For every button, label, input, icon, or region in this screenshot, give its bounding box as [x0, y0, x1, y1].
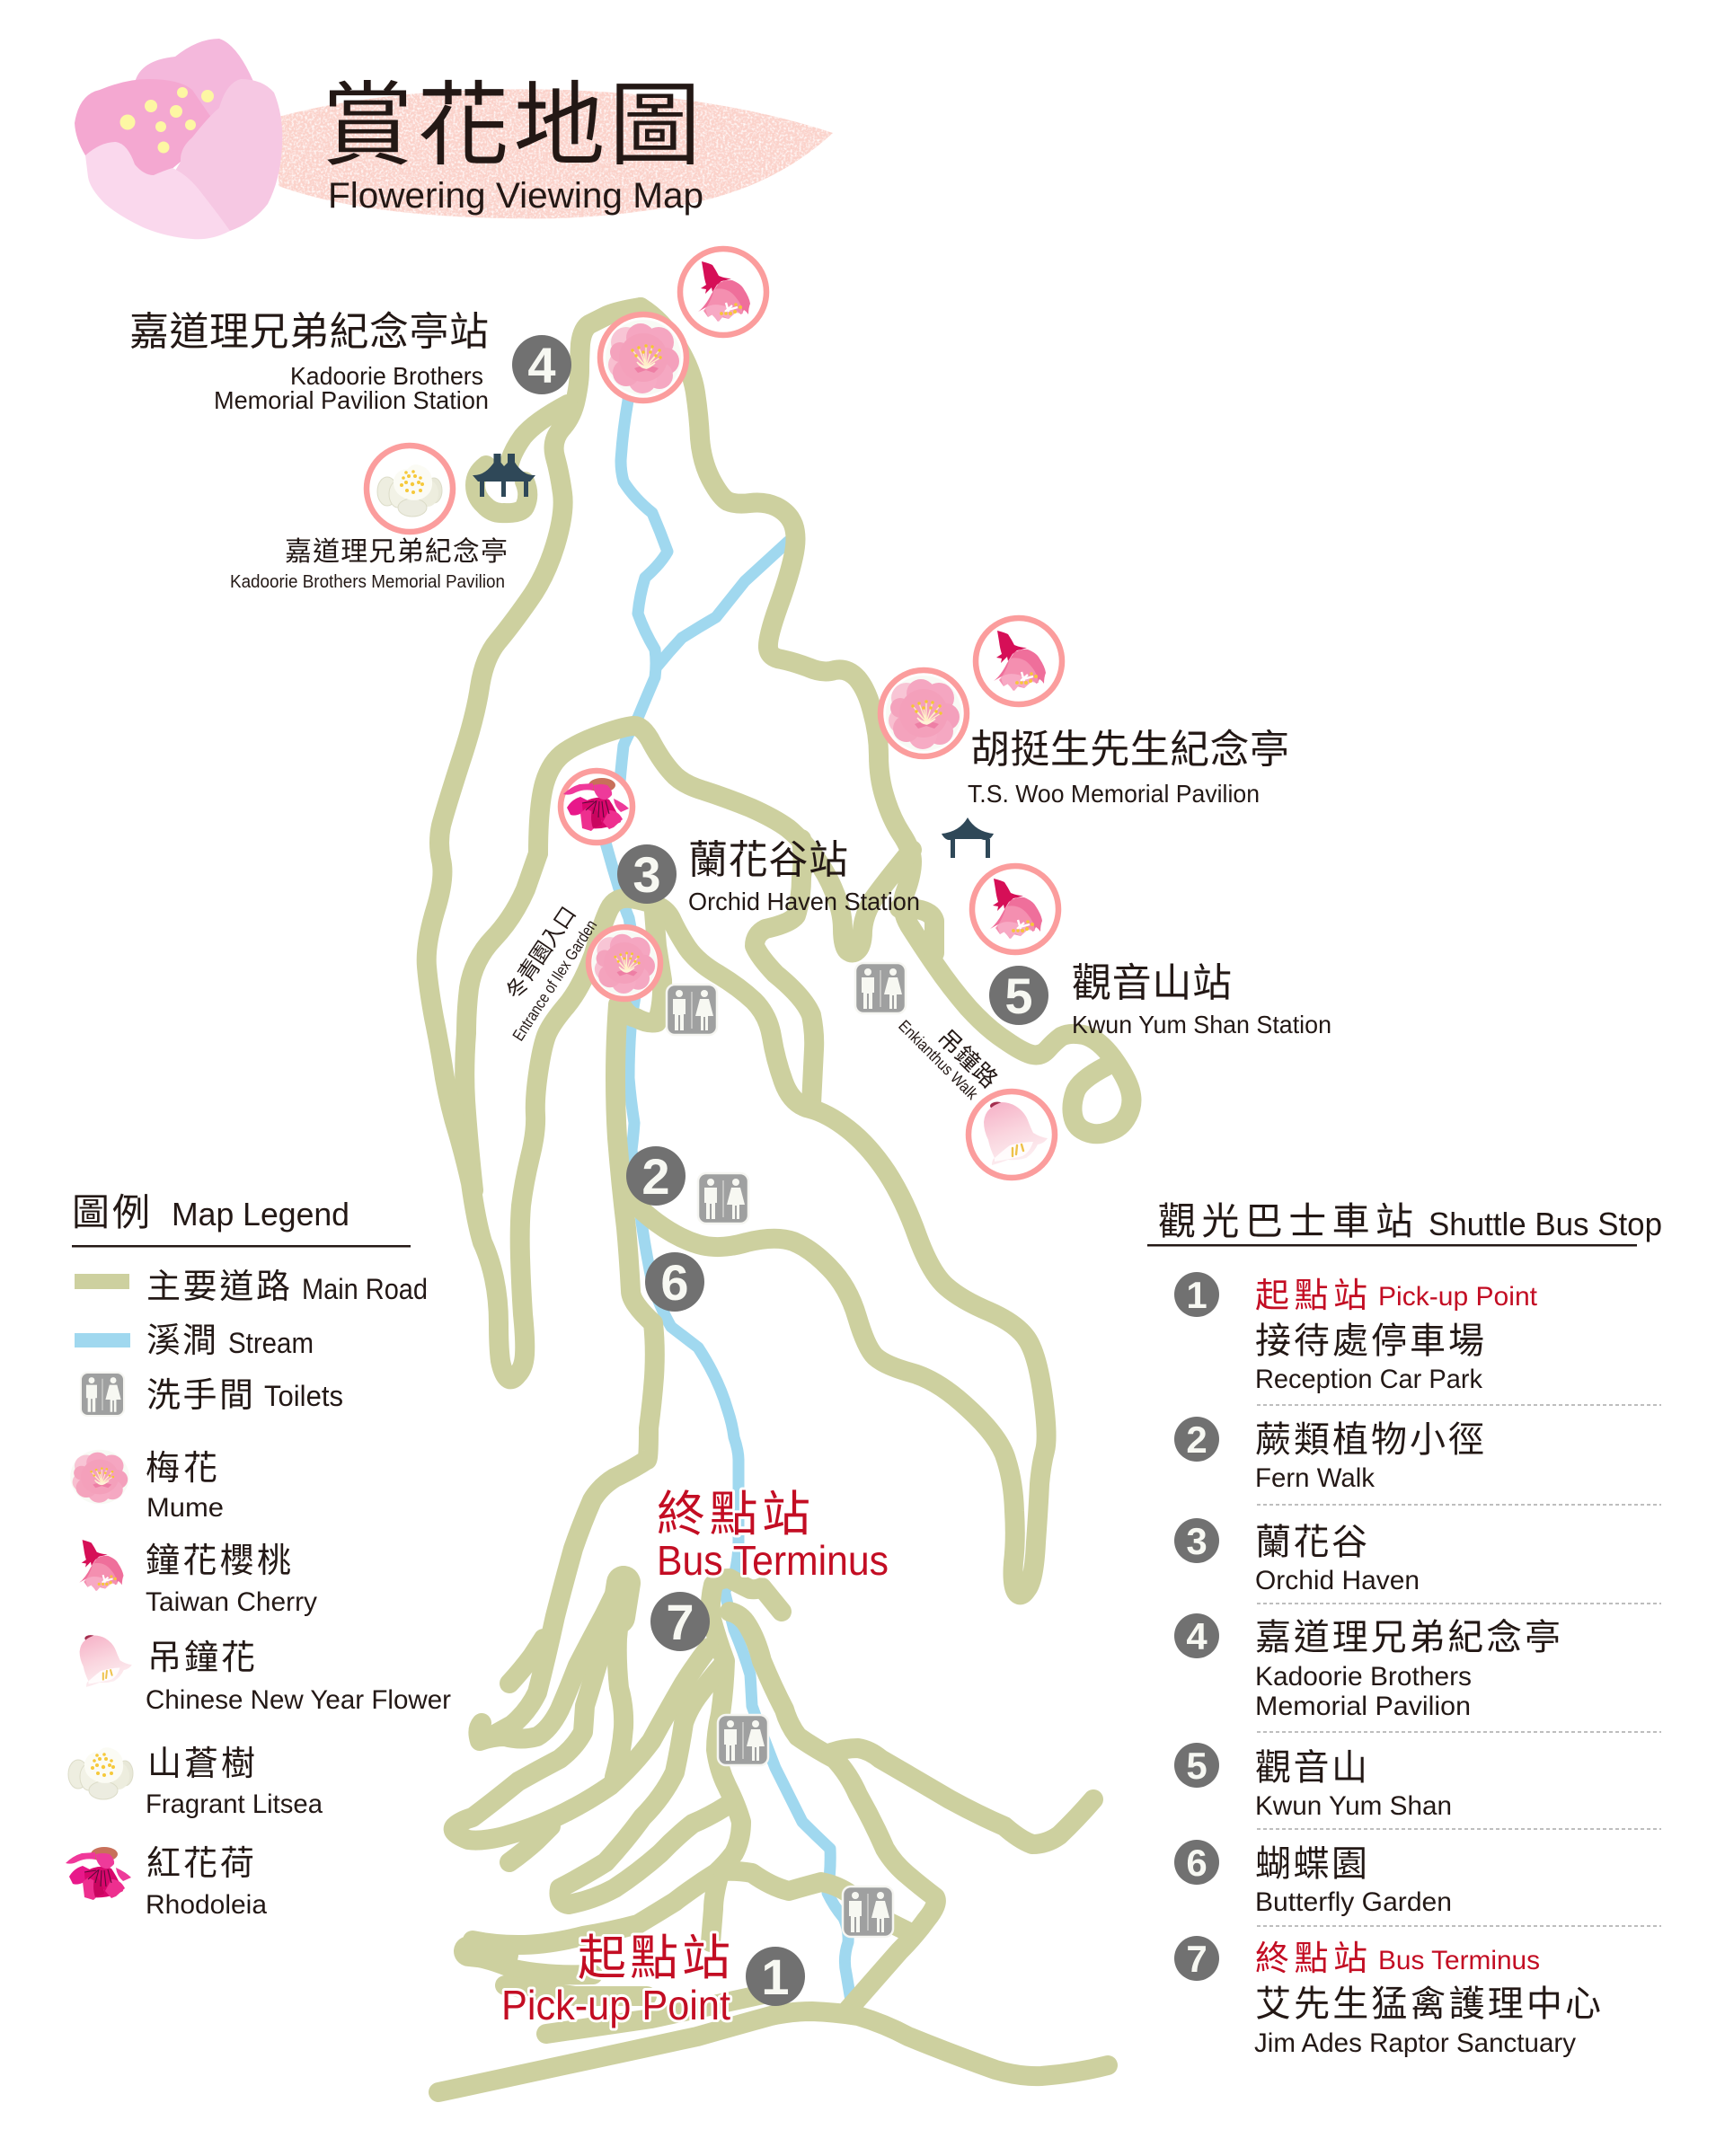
badge 1: [746, 1947, 805, 2006]
icon: ring mume orchid: [588, 927, 660, 999]
legend heading: 圖例: [72, 1182, 150, 1237]
icon: toilet orchid: [667, 985, 717, 1035]
legend: rhodoleia: Rhodoleia: [146, 1890, 267, 1920]
legend: main road: 主要道路: [146, 1259, 290, 1308]
stop 4: Memorial Pavilion: [1255, 1692, 1471, 1721]
stop 7: Jim Ades Raptor Sanctuary: [1254, 2028, 1576, 2058]
title background leaf: [279, 89, 833, 218]
label: ilex garden entrance: 冬青園入口: [497, 899, 582, 1004]
label: orchid haven station: [688, 827, 920, 915]
label: enkianthus walk: Enkianthus Walk: [895, 1017, 982, 1103]
legend: mume: 梅花: [146, 1440, 217, 1489]
legend: main road: Main Road: [302, 1273, 428, 1305]
label: orchid haven station: Orchid Haven Station: [688, 888, 920, 915]
legend: toilets: Toilets: [264, 1380, 343, 1412]
legend: taiwan cherry: 鐘花櫻桃: [146, 1533, 291, 1582]
icon: title flower: [75, 39, 282, 239]
label: pick-up point: [501, 1918, 730, 2028]
icon: pavilion kadoorie: [473, 454, 535, 497]
stop 1: [1174, 1268, 1661, 1405]
legend: chinese new year flower: 吊鐘花: [147, 1630, 255, 1679]
stop 7: Bus Terminus: [1378, 1946, 1540, 1975]
icon: ring mume pavilion: [880, 670, 967, 756]
stop 5: 5: [1186, 1745, 1208, 1787]
label: kadoorie station: [129, 299, 489, 414]
stop 3: 蘭花谷: [1255, 1513, 1367, 1565]
label: woo pavilion: T.S. Woo Memorial Pavilion: [968, 780, 1260, 808]
badge 7: [650, 1592, 710, 1651]
badge 4: 4: [527, 337, 556, 393]
legend heading: Map Legend: [172, 1196, 349, 1233]
shuttle heading: Shuttle Bus Stop: [1429, 1206, 1662, 1242]
badge 2: 2: [641, 1148, 670, 1205]
stop 3: 3: [1186, 1520, 1208, 1562]
label: kadoorie pavilion: [230, 529, 508, 592]
label: pick-up point: 起點站: [578, 1918, 730, 1989]
badge 1: 1: [761, 1948, 790, 2005]
label: kadoorie station: 嘉道理兄弟紀念亭站: [129, 299, 489, 357]
stop 2: 蕨類植物小徑: [1255, 1410, 1484, 1462]
stop 3: [1174, 1513, 1661, 1604]
title: 賞花地圖: [322, 52, 701, 184]
streams: [606, 377, 851, 2001]
legend: fragrant litsea: 山蒼樹: [147, 1736, 255, 1785]
stop 4: 4: [1186, 1615, 1208, 1657]
label: bus terminus: Bus Terminus: [657, 1537, 889, 1584]
label: woo pavilion: [968, 717, 1289, 808]
stop 6: 6: [1186, 1842, 1208, 1884]
legend: toilets: [81, 1367, 343, 1417]
legend: rhodoleia: 紅花荷: [146, 1835, 254, 1885]
legend: fragrant litsea: Fragrant Litsea: [146, 1789, 323, 1819]
badge 5: [989, 966, 1048, 1025]
legend: mume: Mume: [146, 1493, 224, 1523]
stop 1: 1: [1186, 1274, 1208, 1316]
icon: ring taiwan cherry top: [680, 249, 766, 335]
legend: taiwan cherry: [79, 1533, 317, 1617]
legend: chinese new year flower: Chinese New Year Flower: [146, 1685, 451, 1715]
stop 3: Orchid Haven: [1255, 1566, 1420, 1595]
stop 1: Reception Car Park: [1255, 1365, 1483, 1394]
icon: ring rhodoleia: [561, 771, 632, 843]
badge 6: 6: [660, 1254, 689, 1311]
stop 2: Fern Walk: [1255, 1463, 1376, 1493]
badge 6: [645, 1252, 704, 1312]
legend: mume: [70, 1440, 224, 1523]
stop 5: 觀音山: [1255, 1738, 1367, 1790]
stop 7: [1174, 1931, 1601, 2058]
main roads: [427, 307, 1131, 2092]
stop 4: 嘉道理兄弟紀念亭: [1255, 1608, 1561, 1660]
stop 7: 終點站: [1255, 1931, 1367, 1980]
stop 1: Pick-up Point: [1378, 1282, 1538, 1312]
badge 3: 3: [632, 846, 661, 903]
badge 5: 5: [1004, 968, 1033, 1024]
legend: taiwan cherry: Taiwan Cherry: [146, 1587, 317, 1617]
label: bus terminus: [657, 1474, 889, 1584]
label: enkianthus walk: 吊鐘路: [931, 1021, 1006, 1094]
panel: map legend: [66, 1182, 451, 1920]
badge 2: [626, 1146, 686, 1206]
label: orchid haven station: 蘭花谷站: [688, 827, 848, 885]
stop 6: 蝴蝶園: [1255, 1834, 1367, 1886]
badge 4: [512, 335, 571, 394]
panel: shuttle bus stop: [1147, 1191, 1662, 2058]
legend: stream: [75, 1312, 314, 1362]
stop 2: 2: [1186, 1418, 1208, 1461]
legend heading: [72, 1182, 411, 1247]
label: bus terminus: 終點站: [657, 1474, 810, 1545]
icon: ring taiwan cherry woo: [976, 618, 1062, 704]
legend: stream: 溪澗: [146, 1312, 217, 1362]
legend: toilets: 洗手間: [146, 1367, 253, 1417]
legend: stream: Stream: [228, 1327, 314, 1359]
legend: rhodoleia: [66, 1835, 267, 1920]
badge 3: [617, 844, 677, 904]
stop 1: 接待處停車場: [1255, 1312, 1484, 1364]
label: pick-up point: Pick-up Point: [501, 1982, 730, 2028]
icon: toilet fern: [698, 1173, 748, 1224]
icon: toilet pickup: [843, 1886, 893, 1937]
stop 4: [1174, 1608, 1661, 1732]
stop 6: [1174, 1834, 1661, 1926]
stop 6: Butterfly Garden: [1255, 1887, 1452, 1917]
icon: ring taiwan cherry kwun yum: [972, 866, 1058, 952]
label: kadoorie station: Kadoorie Brothers: [290, 362, 483, 390]
shuttle heading: [1147, 1191, 1662, 1247]
icon: toilet terminus: [718, 1715, 768, 1765]
icon: pavilion woo memorial: [942, 817, 994, 858]
label: kwun yum shan station: [1072, 950, 1331, 1038]
label: kadoorie pavilion: 嘉道理兄弟紀念亭: [285, 529, 508, 569]
label: kadoorie pavilion: Kadoorie Brothers Memorial Pavilion: [230, 572, 505, 592]
stop 7: 艾先生猛禽護理中心: [1255, 1975, 1601, 2027]
label: ilex garden entrance: Entrance of Ilex Garden: [509, 916, 600, 1044]
stop 1: 起點站: [1255, 1268, 1367, 1317]
stop 2: [1174, 1410, 1661, 1505]
legend: fragrant litsea: [68, 1736, 323, 1819]
label: kwun yum shan station: Kwun Yum Shan Station: [1072, 1011, 1331, 1038]
label: woo pavilion: 胡挺生先生紀念亭: [970, 717, 1289, 774]
label: kwun yum shan station: 觀音山站: [1072, 950, 1232, 1008]
icon: ring mume top: [600, 314, 686, 401]
stop 5: Kwun Yum Shan: [1255, 1791, 1452, 1821]
legend: chinese new year flower: [80, 1630, 451, 1715]
legend: main road: [75, 1259, 428, 1308]
icon: toilet walk: [855, 963, 906, 1013]
stop 5: [1174, 1738, 1661, 1829]
icon: ring fragrant litsea: [367, 446, 453, 532]
stop 7: 7: [1186, 1938, 1208, 1980]
title: Flowering Viewing Map: [328, 176, 703, 216]
stop 4: Kadoorie Brothers: [1255, 1662, 1472, 1692]
label: kadoorie station: Memorial Pavilion Station: [214, 386, 489, 414]
shuttle heading: 觀光巴士車站: [1158, 1191, 1413, 1246]
badge 7: 7: [666, 1594, 694, 1650]
icon: ring enkianthus: [969, 1091, 1055, 1178]
